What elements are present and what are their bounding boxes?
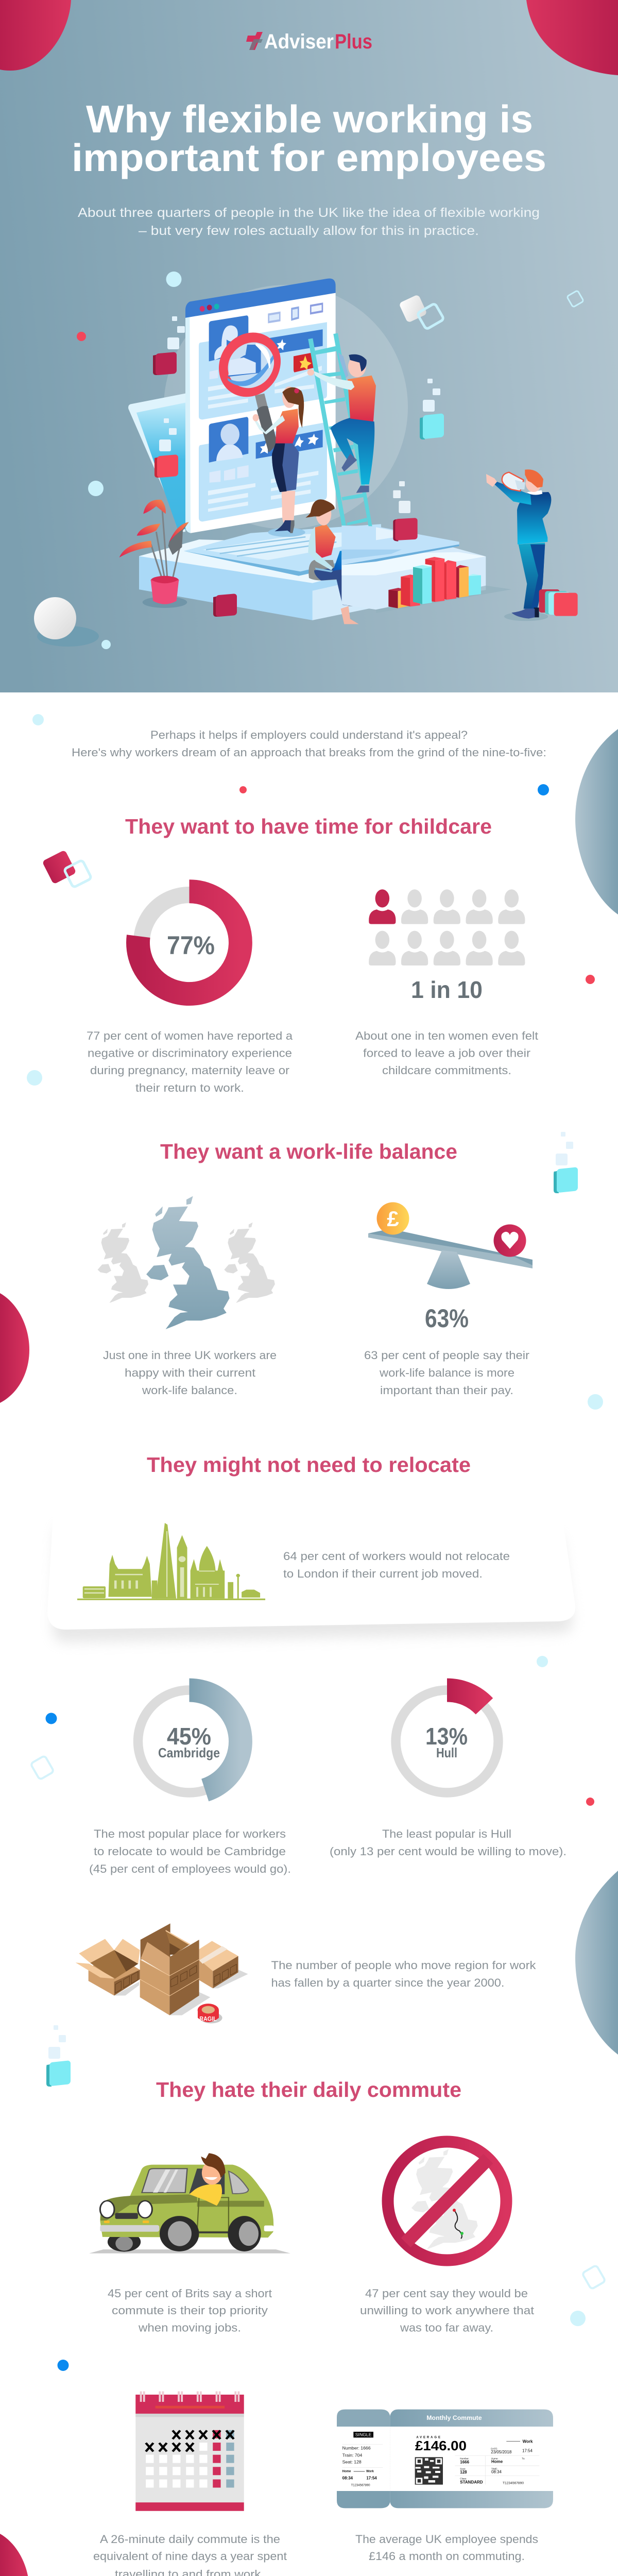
illustration: man driving car: [89, 2153, 290, 2253]
icon: train ticket: STANDARD: [460, 2480, 483, 2485]
intro text: [72, 728, 546, 759]
text: Cambridge: (45 per cent of employees would go).: [89, 1862, 291, 1875]
icon: no long commute: [388, 2142, 506, 2260]
donut chart: Hull 13%: 13%: [425, 1723, 468, 1750]
text: one in three: work-life balance.: [142, 1384, 237, 1397]
heading: relocate: They might not need to relocate: [147, 1453, 471, 1477]
bar chart: [388, 557, 481, 608]
text: Cambridge: to relocate to would be Cambridge: [94, 1845, 286, 1858]
logo: header: Adviser: [264, 30, 334, 53]
text: one in ten women: About one in ten women even felt: [355, 1029, 539, 1042]
tape roll: [198, 2004, 222, 2023]
text: too far away: was too far away.: [400, 2321, 493, 2334]
small cubes: [393, 481, 418, 541]
icon: seesaw with coin and heart: £: [387, 1207, 399, 1231]
donut chart: Cambridge 45%: 45%: [167, 1723, 211, 1750]
text: Hull: [330, 1827, 566, 1858]
text: one in ten women: [355, 1029, 539, 1077]
icon: train ticket: 08:34: [491, 2470, 502, 2475]
stat: 63%: 63%: [425, 1304, 469, 1333]
decorative shapes: page: [0, 714, 618, 2576]
text: 64 per cent: [283, 1550, 510, 1580]
donut chart: Hull 13%: [396, 1690, 499, 1793]
text: 77 per cent of women: their return to work.: [135, 1081, 244, 1094]
icon group: 1 in 10 people: [369, 889, 525, 965]
decorative circle behind screen: [164, 285, 408, 529]
ladder: [308, 333, 372, 536]
intro text: Perhaps it helps if employers could understand it's appeal?: [150, 728, 468, 741]
floating blocks: [153, 316, 444, 617]
star card: [294, 352, 314, 372]
text: 77 per cent of women: 77 per cent of women have reported a: [87, 1029, 293, 1042]
icon: train ticket: AVERAGE: [416, 2436, 440, 2439]
text: 26-minute commute: [93, 2533, 287, 2576]
suitcases: [539, 589, 578, 616]
text: too far away: [360, 2287, 535, 2334]
text: short commute: commute is their top priority: [112, 2304, 268, 2317]
icon: train ticket: 23/05/2018: [491, 2450, 512, 2454]
text: 77 per cent of women: during pregnancy, maternity leave or: [90, 1064, 290, 1077]
subtitle: [78, 206, 540, 238]
icon: train ticket: TIME:: [491, 2467, 497, 2470]
text: Cambridge: The most popular place for workers: [94, 1827, 286, 1840]
title: Why flexible working is: [86, 97, 533, 141]
icon: train ticket: SINGLE: [355, 2432, 372, 2437]
text: move region: The number of people who move region for work: [271, 1959, 536, 1972]
tall box: [140, 1923, 199, 2015]
tape roll: RAGIL: [199, 2015, 217, 2023]
title: important for employees: [72, 136, 546, 179]
text: £146 a month: [355, 2533, 538, 2563]
icon: train ticket: T1234567890: [351, 2484, 370, 2487]
icon: train ticket: Home: [491, 2460, 503, 2464]
text: short commute: 45 per cent of Brits say a short: [108, 2287, 272, 2300]
donut chart: Cambridge 45%: Cambridge: [158, 1745, 220, 1760]
heading: work-life balance: They want a work-life balance: [160, 1140, 457, 1163]
icon: train ticket: Class:: [460, 2478, 467, 2480]
donut chart: Cambridge 45%: [138, 1690, 241, 1793]
text: short commute: [108, 2287, 272, 2334]
text: one in three: [103, 1349, 277, 1397]
text: move region: [271, 1959, 536, 1989]
icon: train ticket: Home:: [491, 2457, 499, 2460]
header panel: [0, 0, 618, 692]
heading: commute: They hate their daily commute: [156, 2078, 461, 2102]
text: £146 a month: £146 a month on commuting.: [369, 2550, 525, 2563]
logo: header: [246, 30, 372, 53]
intro text: Here's why workers dream of an approach that breaks from the grind of the nine-to-five:: [72, 746, 546, 759]
text: Hull: The least popular is Hull: [382, 1827, 511, 1840]
icon: calendar: [135, 2392, 244, 2511]
icon: train ticket: Seat:: [460, 2467, 466, 2470]
icon: train ticket: 17:54: [522, 2448, 533, 2453]
open box: [76, 1939, 140, 1995]
icon: train ticket: [337, 2410, 553, 2508]
illustration: cardboard boxes: [76, 1923, 248, 2023]
woman with magnifier: [253, 386, 305, 537]
text: 63 per cent: [364, 1349, 530, 1397]
icon: train ticket: 1666: [460, 2460, 470, 2464]
icon: train ticket: T1234567890: [503, 2482, 524, 2485]
text: one in ten women: childcare commitments.: [382, 1064, 511, 1077]
donut chart: 77%: 77%: [167, 931, 215, 960]
icon: train ticket: Monthly Commute: [426, 2414, 482, 2421]
subtitle: – but very few roles actually allow for this in practice.: [139, 224, 479, 238]
text: 64 per cent: 64 per cent of workers would not relocate: [283, 1550, 510, 1563]
magnifying glass: [216, 327, 283, 452]
text: short commute: when moving jobs.: [138, 2321, 241, 2334]
text: 64 per cent: to London if their current job moved.: [283, 1567, 483, 1580]
text: one in three: Just one in three UK workers are: [103, 1349, 277, 1362]
donut chart: Hull 13%: Hull: [436, 1745, 457, 1760]
title: [72, 97, 546, 179]
laptop lid: [128, 394, 185, 532]
card: London: [47, 1503, 575, 1630]
icon: train ticket: 08:34: [342, 2476, 353, 2481]
text: move region: has fallen by a quarter since the year 2000.: [271, 1976, 505, 1989]
text: 26-minute commute: A 26-minute daily commute is the: [100, 2533, 280, 2546]
card shadow: [53, 1525, 573, 1642]
QR code: [415, 2457, 443, 2485]
hero illustration: screen, people and laptop: [119, 278, 381, 624]
icon: train ticket: Train: 704: [342, 2452, 363, 2458]
icon: train ticket: To:: [522, 2457, 525, 2460]
icon: train ticket: £146.00: [415, 2438, 467, 2453]
text: 77 per cent of women: negative or discriminatory experience: [88, 1047, 292, 1059]
donut chart: 77%: [138, 891, 241, 994]
text: 26-minute commute: equivalent of nine days a year spent: [93, 2550, 287, 2563]
plant: [119, 500, 189, 608]
icon: train ticket: Home: [342, 2470, 351, 2473]
text: one in three: happy with their current: [125, 1366, 256, 1379]
icon: seesaw with coin and heart: [368, 1202, 533, 1289]
icon: train ticket: 128: [460, 2470, 467, 2475]
icon: train ticket: Work: [366, 2470, 374, 2473]
subtitle: About three quarters of people in the UK like the idea of flexible working: [78, 206, 540, 220]
man with megaphone: [486, 469, 551, 621]
website window: [185, 278, 336, 533]
man on ladder: [307, 352, 376, 493]
laptop base and platform: [139, 524, 381, 620]
icon: train ticket: Number:: [460, 2457, 469, 2460]
text: 63 per cent: work-life balance is more: [379, 1366, 514, 1379]
hero illustration: right side: [341, 469, 578, 621]
icon: train ticket: Number: 1666: [342, 2446, 371, 2451]
text: too far away: 47 per cent say they would be: [365, 2287, 528, 2300]
text: too far away: unwilling to work anywhere that: [360, 2304, 535, 2317]
hero decorative dots: [34, 272, 583, 649]
heading: childcare: They want to have time for childcare: [125, 815, 492, 838]
text: Cambridge: [89, 1827, 291, 1875]
stat: 1 in 10: 1 in 10: [411, 976, 483, 1003]
icon: train ticket: 17:54: [366, 2476, 377, 2481]
map: UK, one in three: [98, 1196, 275, 1329]
text: £146 a month: The average UK employee spends: [355, 2533, 538, 2546]
icon: train ticket: Work: [523, 2439, 533, 2444]
icon: train ticket: DATE:: [491, 2448, 498, 2450]
illustration: London skyline: [77, 1523, 265, 1600]
seated woman: [305, 499, 367, 624]
logo: header: Plus: [335, 30, 372, 53]
icon: train ticket: Seat: 128: [342, 2460, 362, 2465]
flat box: [199, 1941, 238, 1988]
keyboard corner and platform: [341, 526, 511, 613]
text: Hull: (only 13 per cent would be willing to move).: [330, 1845, 566, 1858]
text: 63 per cent: important than their pay.: [380, 1384, 513, 1397]
text: 77 per cent of women: [87, 1029, 293, 1094]
text: one in ten women: forced to leave a job over their: [363, 1047, 531, 1059]
text: 63 per cent: 63 per cent of people say their: [364, 1349, 530, 1362]
